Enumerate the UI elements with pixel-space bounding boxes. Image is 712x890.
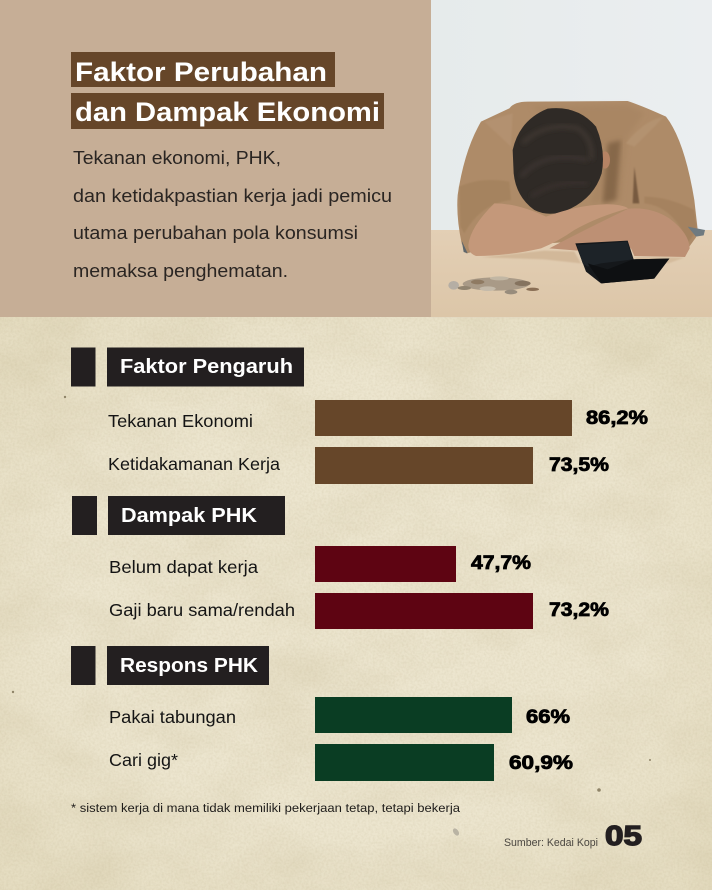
section: Respons PHK: [71, 646, 573, 781]
row: Cari gig: 60,9%: [509, 752, 573, 774]
title line 2: dan Dampak Ekonomi: [75, 97, 380, 127]
footnote: * sistem kerja di mana tidak memiliki pekerjaan tetap, tetapi bekerja: [71, 801, 460, 815]
row: Belum dapat kerja: [109, 546, 531, 582]
row: Gaji baru sama/rendah: 73,2%: [549, 599, 609, 621]
row: Belum dapat kerja: Belum dapat kerja: [109, 557, 258, 577]
table: [431, 230, 712, 317]
intro text: dan ketidakpastian kerja jadi pemicu: [73, 185, 392, 206]
section heading: [107, 348, 304, 386]
table shadow: [481, 251, 581, 263]
row: Tekanan Ekonomi: Tekanan Ekonomi: [108, 411, 253, 431]
title highlight line 2: [71, 93, 384, 129]
paper background: [0, 317, 712, 890]
hair: [513, 108, 603, 214]
shirt: [457, 101, 705, 253]
row: Gaji baru sama/rendah: Gaji baru sama/rendah: [109, 600, 295, 620]
intro text: Tekanan ekonomi, PHK,: [73, 147, 281, 168]
section heading: [108, 496, 285, 535]
photo: man resting head on table with empty wallet: [431, 0, 712, 317]
page number: 05: [605, 820, 642, 851]
title highlight line 1: [71, 52, 335, 87]
right arm: [549, 208, 690, 257]
section heading: Faktor Pengaruh: [120, 355, 293, 378]
section heading: Respons PHK: [120, 654, 258, 677]
section marker: [71, 646, 96, 685]
intro text: memaksa penghematan.: [73, 260, 288, 281]
row: Cari gig: Cari gig*: [109, 750, 178, 770]
row: Tekanan Ekonomi: 86,2%: [586, 407, 648, 429]
title line 1: Faktor Perubahan: [75, 57, 327, 87]
row: Belum dapat kerja: 47,7%: [471, 552, 531, 574]
row: Cari gig: [109, 744, 573, 781]
section: Faktor Pengaruh: [71, 348, 648, 484]
intro text: utama perubahan pola konsumsi: [73, 222, 358, 243]
row: Ketidakamanan Kerja: Ketidakamanan Kerja: [108, 454, 280, 474]
row: Ketidakamanan Kerja: 73,5%: [549, 454, 609, 476]
row: Tekanan Ekonomi: [108, 400, 648, 436]
intro text: [73, 147, 392, 281]
source: Sumber: Kedai Kopi: [504, 837, 598, 849]
section heading: Dampak PHK: [121, 504, 257, 527]
section: Dampak PHK: [72, 496, 609, 629]
header panel: [0, 0, 431, 317]
coins: [448, 276, 539, 294]
ear: [602, 152, 610, 168]
row: Pakai tabungan: Pakai tabungan: [109, 707, 236, 727]
row: Ketidakamanan Kerja: [108, 447, 609, 484]
row: Pakai tabungan: 66%: [526, 706, 570, 728]
left arm: [468, 203, 628, 256]
section marker: [72, 496, 97, 535]
section heading: [107, 646, 269, 685]
section marker: [71, 348, 96, 386]
row: Gaji baru sama/rendah: [109, 593, 609, 629]
title: [71, 52, 384, 129]
wallet: [575, 241, 669, 283]
row: Pakai tabungan: [109, 697, 570, 733]
